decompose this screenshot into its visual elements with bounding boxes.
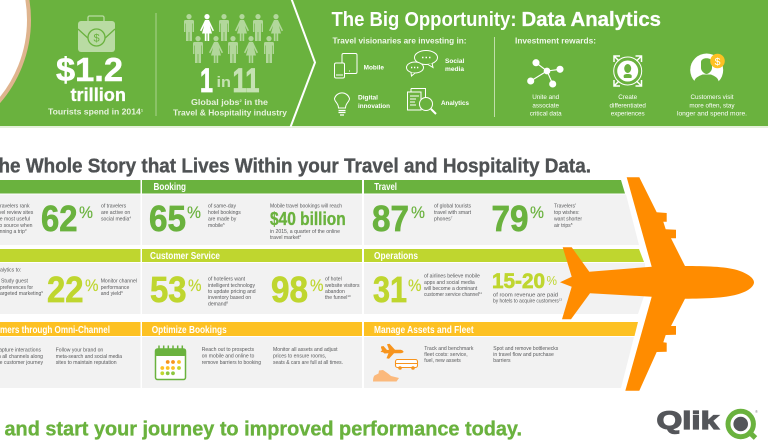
text: hoteliers: inventory based on xyxy=(208,295,251,301)
text: same-day xyxy=(208,204,241,229)
stat: 65 percent: % xyxy=(187,203,201,222)
stat: 22 percent: % xyxy=(85,276,98,295)
icon: differentiated experience xyxy=(614,56,642,86)
text: monitor channel: and yield xyxy=(101,291,121,297)
stat: $1.2 trillion: $1.2 xyxy=(56,51,123,88)
caption: global jobs: 2 xyxy=(240,99,242,103)
text: travelers rank: e most useful xyxy=(0,216,30,222)
icon: light bulb xyxy=(334,93,350,115)
text: top wishes: top wishes: xyxy=(554,210,579,216)
caption: global jobs xyxy=(173,98,288,118)
text: same-day: of same-day xyxy=(208,204,236,210)
text: room revenue: of room revenue are paid xyxy=(493,292,558,298)
stat: $40 billion: Mobile travel bookings will reach xyxy=(270,204,342,210)
text: top wishes: 8 xyxy=(571,222,573,226)
text: airlines: will become a dominant xyxy=(424,286,478,292)
stat: $40 billion: $40 billion xyxy=(270,209,346,229)
caption: customers: longer and spend more. xyxy=(677,111,747,118)
heading: big opportunity: The Big Opportunity: xyxy=(332,9,516,31)
text: room revenue xyxy=(493,292,562,305)
icon: fleet plane bus and ship xyxy=(373,344,418,382)
stat: 1 in 11: 11 xyxy=(232,62,260,100)
icon: connected nodes xyxy=(528,60,563,87)
text: active on social xyxy=(101,204,131,222)
text: monitor channel: 9 xyxy=(121,290,123,294)
stat: 1 in 11: in xyxy=(216,74,231,91)
caption: global jobs: in the xyxy=(242,98,269,107)
caption: unite: associate xyxy=(532,102,559,110)
text: track and benchmark xyxy=(424,346,474,364)
text: active on social: are active on xyxy=(101,210,130,216)
caption: create: Create xyxy=(618,94,638,101)
text: analytics to: Study guest xyxy=(1,278,28,284)
text: hoteliers: intelligent technology xyxy=(208,283,255,289)
text: top wishes: air trips xyxy=(554,223,571,229)
caption: customers xyxy=(677,94,747,118)
caption: unite: critical data xyxy=(530,111,562,118)
text: monitor assets: prices to ensure rooms, xyxy=(273,353,326,359)
text: same-day: are made by xyxy=(208,216,237,222)
text: reach out xyxy=(202,347,261,366)
text: global tourists: phones xyxy=(434,216,451,222)
icon: analytics document with magnifier xyxy=(408,88,436,114)
heading: big opportunity: Data Analytics xyxy=(522,9,661,31)
text: active on social: social media xyxy=(101,216,129,222)
text: hotel website xyxy=(325,276,360,301)
label: digital innovation: Digital xyxy=(358,94,378,102)
stat: 98 percent: % xyxy=(310,276,324,295)
circular photo edge xyxy=(0,0,29,145)
text: airlines: apps and social media xyxy=(424,280,475,286)
heading: manage assets: Manage Assets and Fleet xyxy=(374,325,474,336)
text: airlines: of airlines believe mobile xyxy=(424,274,480,280)
text: travelers rank: nning a trip xyxy=(0,229,25,235)
text: analytics to: alytics to: xyxy=(0,268,21,274)
icon: customer with coin xyxy=(690,54,725,88)
stat: 62 percent: % xyxy=(79,203,93,222)
text: hoteliers xyxy=(208,276,256,308)
heading: big opportunity xyxy=(332,9,661,31)
text: reach out: Reach out to prospects xyxy=(202,347,255,353)
label: digital innovation: innovation xyxy=(358,103,390,110)
label: analytics: Analytics xyxy=(441,100,469,107)
stat: 98 percent: 98 xyxy=(271,269,308,310)
text: monitor assets: Monitor all assets and adjust xyxy=(273,347,338,353)
text: track and benchmark: fuel, new assets xyxy=(424,358,461,364)
stat: 22 percent: 22 xyxy=(47,269,84,310)
qlik logo: Qlik xyxy=(656,407,719,435)
text: hoteliers: to update pricing and xyxy=(208,289,256,295)
arrow divider xyxy=(290,0,315,127)
text: analytics to: argeted marketing xyxy=(0,291,41,297)
text: hotel website: 10 xyxy=(347,294,351,298)
text: global tourists: of global tourists xyxy=(434,204,472,210)
caption: unite xyxy=(530,94,562,118)
stat: 53 percent: 53 xyxy=(150,269,186,310)
text: hoteliers: 8 xyxy=(226,300,228,304)
panel: row three xyxy=(0,322,638,388)
icon: chat bubbles xyxy=(406,50,438,76)
stat: 87 percent: % xyxy=(411,203,425,222)
top banner xyxy=(0,0,768,145)
stat: $40 billion: 6 xyxy=(299,234,301,238)
stat: $1.2 trillion: 1 xyxy=(141,108,143,112)
text: same-day: 5 xyxy=(223,222,225,226)
stat: 1 in 11 xyxy=(200,62,260,100)
text: room revenue: 13 xyxy=(559,298,562,302)
text: follow your brand: meta-search and social media xyxy=(56,354,122,360)
icon: calendar xyxy=(155,346,186,380)
text: global tourists xyxy=(434,204,472,222)
text: capture interactions: e customer journey xyxy=(0,360,43,366)
label: digital innovation xyxy=(358,94,390,110)
icon: briefcase with dollar: $ xyxy=(93,32,100,44)
text: same-day: hotel bookings xyxy=(208,210,241,216)
icon: people row, one in eleven highlighted xyxy=(184,14,283,63)
text: global tourists: travel with smart xyxy=(434,210,472,216)
caption: create xyxy=(610,94,646,118)
text: spot and remove: Spot and remove bottlenecks xyxy=(493,346,559,352)
stat: $40 billion: travel market xyxy=(270,235,299,241)
orange airplane xyxy=(560,177,754,391)
text: hoteliers: of hoteliers want xyxy=(208,276,246,282)
text: analytics to xyxy=(0,268,43,297)
caption: unite: Unite and xyxy=(532,94,560,101)
text: airlines: 11 xyxy=(479,291,482,295)
stat: 53 percent: % xyxy=(188,276,202,295)
text: hotel website: abandon xyxy=(325,289,345,295)
text: active on social: 4 xyxy=(129,216,131,220)
text: capture interactions xyxy=(0,348,43,366)
heading: travel: Travel xyxy=(374,182,397,193)
heading: omni-channel: mers through Omni-Channel xyxy=(0,325,110,336)
text: monitor channel xyxy=(101,278,137,297)
caption: customers: more often, stay xyxy=(689,102,735,110)
stat: 65 percent: 65 xyxy=(149,198,186,239)
stat: 31 percent: % xyxy=(408,276,422,295)
stat: $40 billion: in 2015, a quarter of the online xyxy=(270,229,340,235)
text: top wishes: Travelers' xyxy=(554,204,576,210)
caption: customers: Customers visit xyxy=(690,94,734,101)
stat: $1.2 trillion: Tourists spend in 2014 xyxy=(48,108,132,116)
icon: mobile devices xyxy=(334,54,357,78)
text: spot and remove xyxy=(493,346,559,364)
caption: global jobs: Global jobs xyxy=(191,98,233,107)
stat: 62 percent: 62 xyxy=(41,198,78,239)
text: spot and remove: in travel flow and purchase xyxy=(493,352,554,358)
text: monitor assets xyxy=(273,347,343,366)
icon: briefcase with dollar xyxy=(78,16,115,52)
stat: 31 percent: 31 xyxy=(373,269,407,310)
qlik logo: ® xyxy=(755,409,758,414)
text: airlines xyxy=(424,274,482,298)
heading: booking: Booking xyxy=(154,182,186,193)
text: hotel website: the funnel xyxy=(325,295,347,301)
caption: global jobs: Travel & Hospitality industry xyxy=(173,108,288,118)
text: same-day: mobile xyxy=(208,223,223,229)
heading: operations: Operations xyxy=(374,251,418,262)
label: social media: Social xyxy=(445,58,465,65)
stat: 1 in 11: 1 xyxy=(200,62,213,100)
label: mobile: Mobile xyxy=(364,64,384,72)
panel: row one xyxy=(0,180,639,245)
text: hotel website: website visitors xyxy=(325,283,360,289)
text: hoteliers: demand xyxy=(208,302,226,308)
text: analytics to: 9 xyxy=(41,290,43,294)
icon: customer with coin: $ xyxy=(715,56,721,68)
closing call to action: and start your journey to improved performance today. xyxy=(4,418,522,440)
text: monitor assets: seats & cars are full at all times. xyxy=(273,360,343,366)
label: social media xyxy=(445,58,465,73)
text: track and benchmark: Track and benchmark xyxy=(424,346,474,352)
text: travelers rank xyxy=(0,204,34,235)
stat: 15-20 percent: 15-20 xyxy=(492,269,545,293)
section title: he Whole Story that Lives Within your Travel and Hospitality Data. xyxy=(0,156,591,178)
text: airlines: customer service channel xyxy=(424,292,482,298)
stat: $1.2 trillion: trillion xyxy=(70,85,126,105)
stat: 79 percent: 79 xyxy=(492,198,528,239)
text: follow your brand: Follow your brand on xyxy=(56,348,103,354)
text: track and benchmark: fleet costs: service, xyxy=(424,352,468,358)
text: follow your brand xyxy=(56,348,122,366)
label: social media: media xyxy=(445,66,464,73)
text: global tourists: 7 xyxy=(451,216,453,220)
qlik logo xyxy=(656,407,758,438)
text: reach out: on mobile and online to xyxy=(202,353,255,359)
subheading: rewards: Investment rewards: xyxy=(515,36,596,46)
text: monitor channel: performance xyxy=(101,285,129,291)
text: monitor channel: Monitor channel xyxy=(101,278,137,284)
text: travelers rank: o source when xyxy=(0,223,33,229)
text: reach out: remove barriers to booking xyxy=(202,360,261,366)
text: top wishes xyxy=(554,204,582,229)
heading: customer service: Customer Service xyxy=(150,251,220,262)
stat: 15-20 percent: % xyxy=(546,273,557,288)
caption: create: experiences xyxy=(611,111,645,118)
text: spot and remove: barriers xyxy=(493,358,511,364)
text: active on social: of travelers xyxy=(101,204,127,210)
caption: create: differentiated xyxy=(610,102,646,110)
text: hotel website: of hotel xyxy=(325,276,342,282)
panel: row two xyxy=(0,249,646,314)
stat: $40 billion xyxy=(270,204,346,241)
stat: 87 percent: 87 xyxy=(372,198,409,239)
subheading: visionaries: Travel visionaries are investing in: xyxy=(332,36,466,46)
heading: optimize bookings: Optimize Bookings xyxy=(152,325,227,336)
text: analytics to: preferences for xyxy=(0,285,33,291)
text: top wishes: want shorter xyxy=(554,216,582,222)
stat: $1.2 trillion xyxy=(48,51,143,116)
text: room revenue: by hotels to acquire customers xyxy=(493,299,562,305)
text: travelers rank: 3 xyxy=(25,228,27,232)
stat: 79 percent: % xyxy=(530,203,544,222)
text: follow your brand: sites to maintain reputation xyxy=(56,360,117,366)
text: capture interactions: apture interactions xyxy=(0,348,41,354)
